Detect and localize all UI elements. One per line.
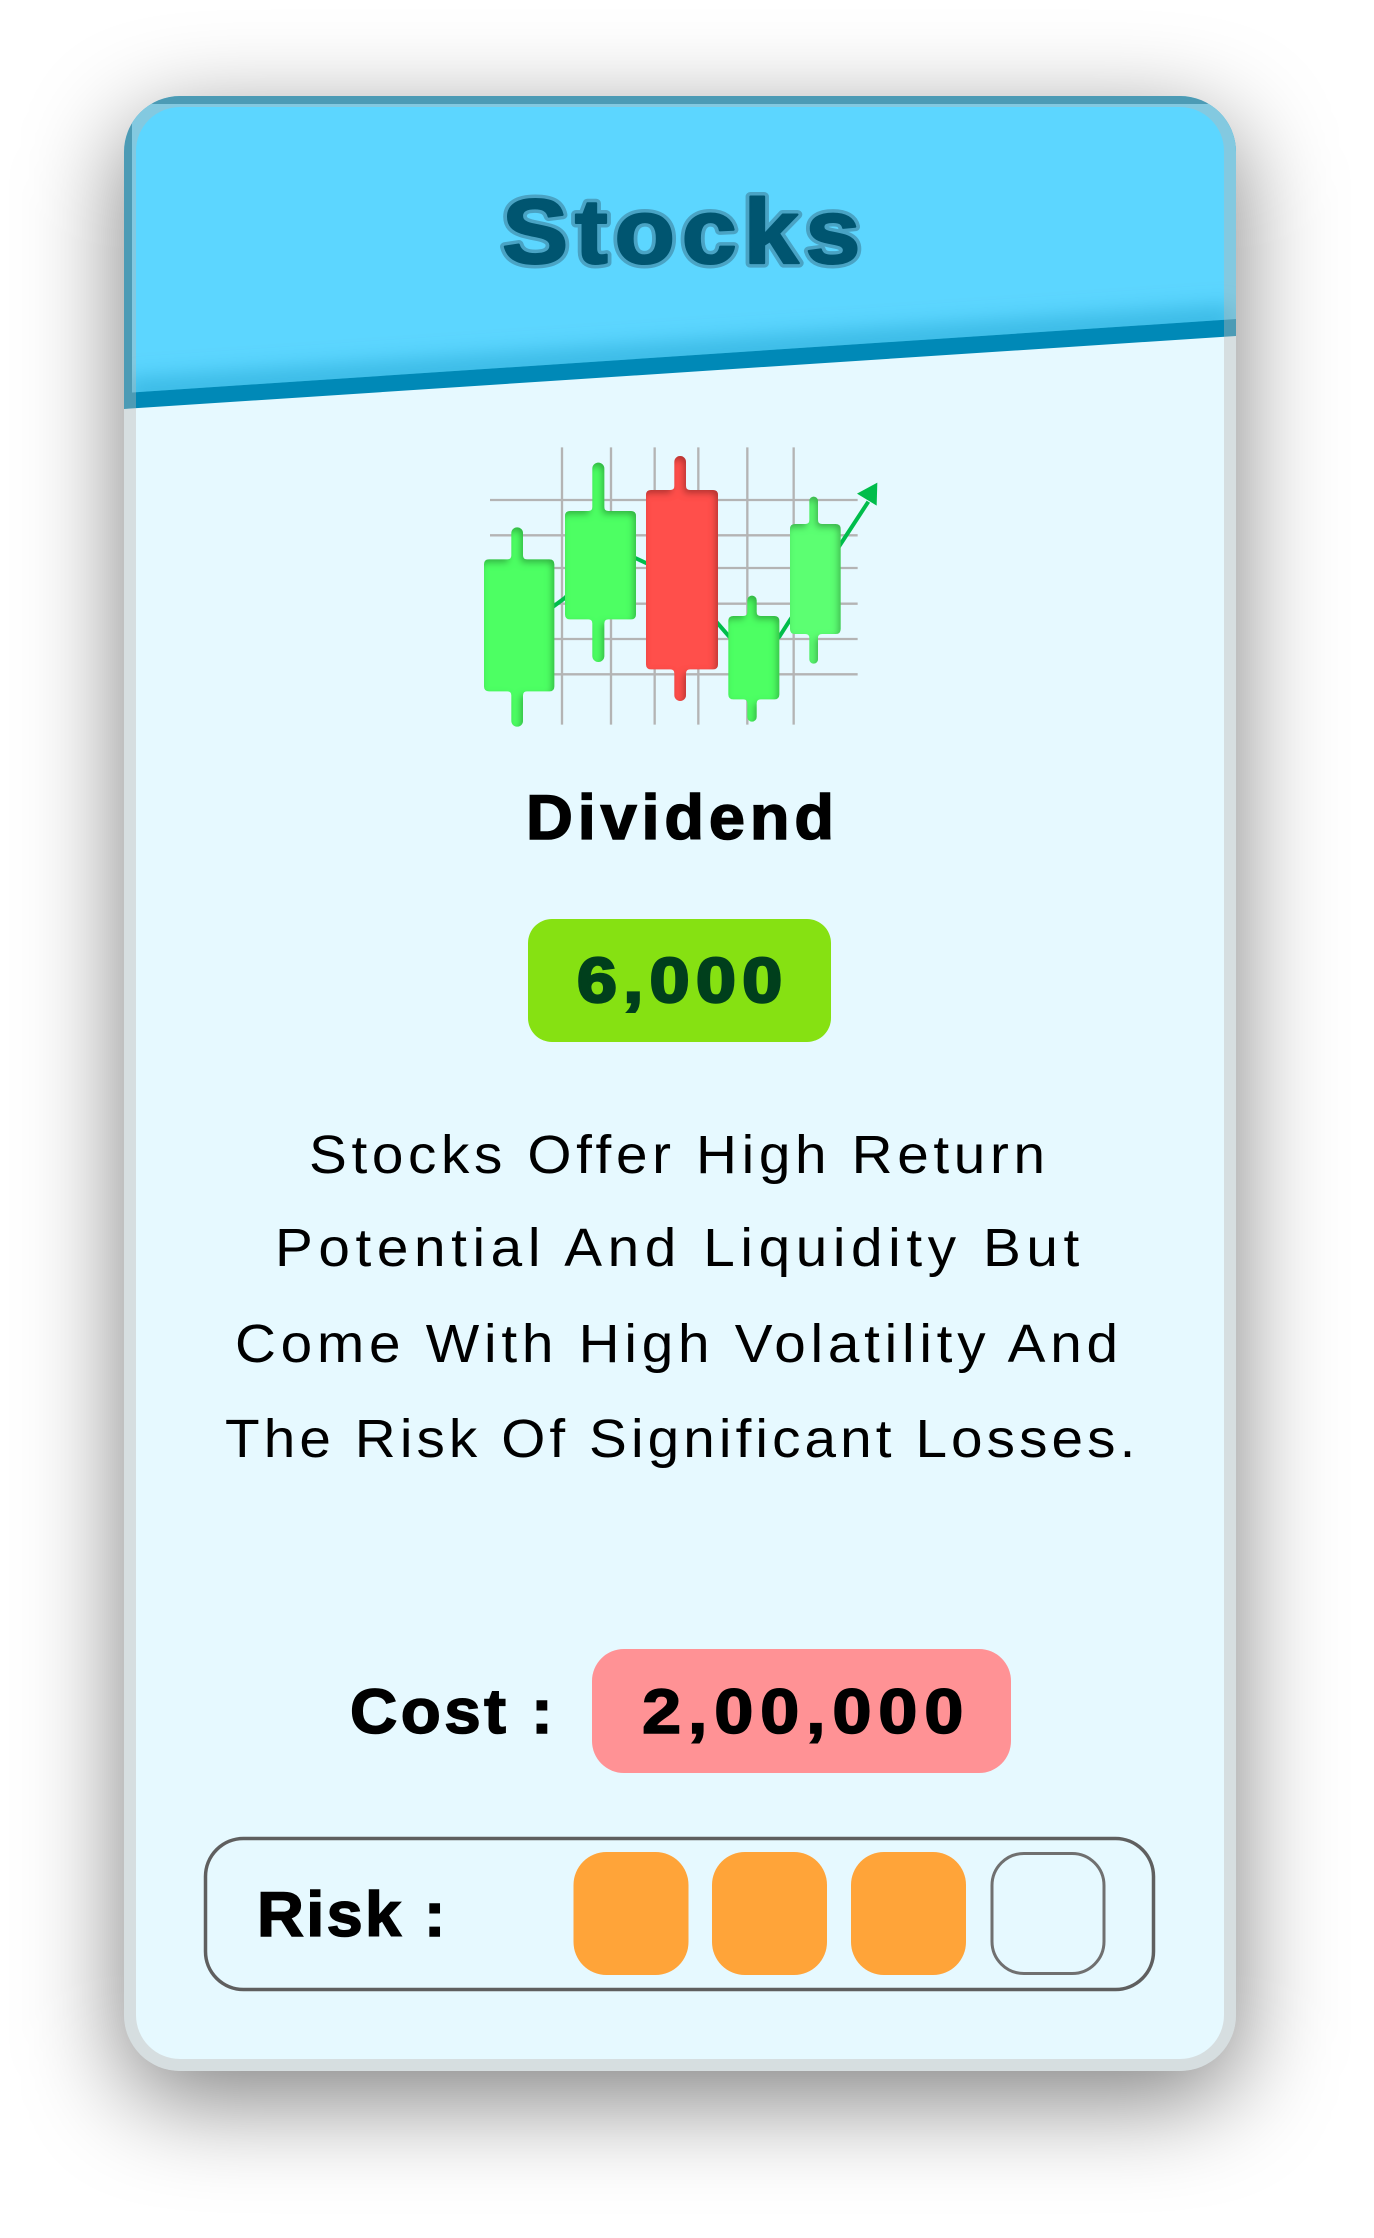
trend arrow xyxy=(520,483,877,660)
candle 3 xyxy=(646,456,718,701)
card border xyxy=(124,96,1236,2071)
cost row xyxy=(350,1649,1011,1773)
risk level 1 xyxy=(574,1852,688,1975)
stock card panel xyxy=(124,96,1240,2071)
cost badge xyxy=(592,1649,1011,1773)
candle 2 xyxy=(565,463,636,662)
title: Stocks: Stocks xyxy=(502,180,861,283)
description text: The Risk Of Significant Losses. xyxy=(225,1408,1135,1469)
description text: Potential And Liquidity But xyxy=(275,1217,1079,1278)
dividend value badge: 6,000 xyxy=(577,946,782,1016)
risk meter xyxy=(206,1838,1154,1990)
cost value: 2,00,000 xyxy=(642,1676,963,1747)
banner with stripe xyxy=(124,96,1240,409)
risk level 4 empty xyxy=(992,1854,1104,1974)
card body xyxy=(124,96,1236,2071)
candle 1 xyxy=(484,527,554,727)
description text: Come With High Volatility And xyxy=(235,1313,1118,1374)
cost label: Cost : xyxy=(350,1676,553,1747)
dividend value badge xyxy=(528,919,831,1042)
risk level 2 xyxy=(712,1852,827,1975)
card drop shadow xyxy=(124,124,1236,2099)
description text: Stocks Offer High Return xyxy=(309,1124,1045,1185)
risk level 3 xyxy=(851,1852,966,1975)
icon: candlestick chart xyxy=(484,447,877,727)
risk label: Risk : xyxy=(257,1879,445,1950)
risk frame xyxy=(206,1838,1154,1990)
description text xyxy=(225,1124,1135,1469)
heading: Dividend: Dividend xyxy=(526,782,834,853)
candle 5 xyxy=(790,497,841,664)
title: Stocks: Stocks xyxy=(502,180,861,283)
chart grid xyxy=(490,447,858,725)
candle 4 xyxy=(728,596,779,722)
